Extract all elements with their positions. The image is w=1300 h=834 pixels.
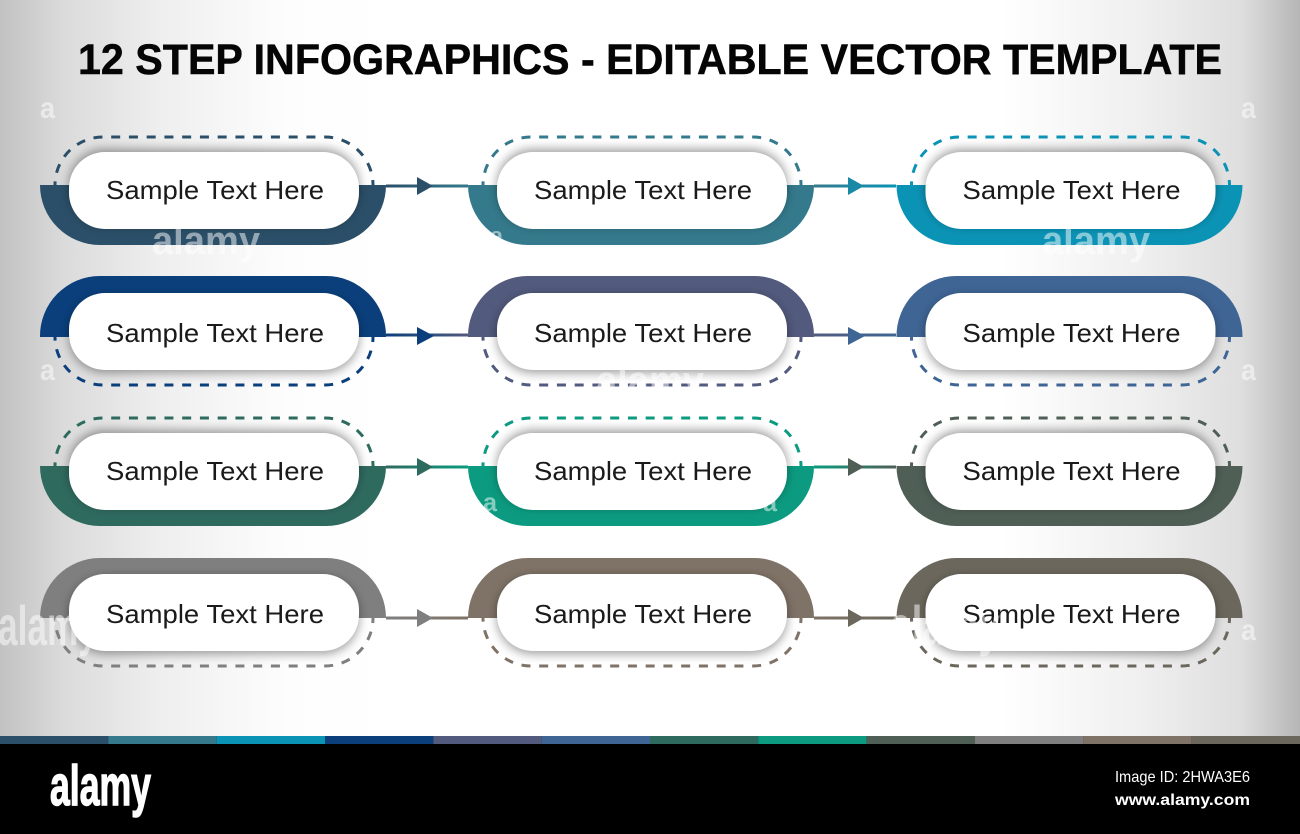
watermark fragments: a xyxy=(790,223,804,248)
watermark fragments: a xyxy=(490,223,504,248)
step 4 card: Sample Text Here xyxy=(106,318,324,348)
arrow: step 4 to 5 xyxy=(386,327,468,345)
watermark fragments: a xyxy=(1241,92,1256,125)
arrow: step 10 to 11 xyxy=(386,609,468,627)
arrow: step 11 to 12 xyxy=(814,609,896,627)
title: 12 STEP INFOGRAPHICS - EDITABLE VECTOR TEMPLATE xyxy=(78,36,1222,84)
step 7 card: Sample Text Here xyxy=(106,456,324,486)
watermark fragments xyxy=(0,92,1256,657)
watermark fragments: a xyxy=(763,487,778,517)
arrow: step 8 to 9 xyxy=(814,458,896,476)
footer logo: alamy xyxy=(50,754,151,818)
step 5 card xyxy=(468,276,814,385)
watermark fragments: alamy xyxy=(152,219,261,263)
step 6 card xyxy=(896,276,1243,385)
watermark fragments: a xyxy=(40,92,55,125)
step 9 card: Sample Text Here xyxy=(962,456,1180,486)
arrow: step 7 to 8 xyxy=(386,458,468,476)
image id: Image ID: 2HWA3E6 xyxy=(1115,769,1250,786)
step 3 card: Sample Text Here xyxy=(962,175,1180,205)
footer bar xyxy=(0,744,1300,834)
arrow: step 2 to 3 xyxy=(814,177,896,195)
step 1 card: Sample Text Here xyxy=(106,175,324,205)
step 10 card: Sample Text Here xyxy=(106,599,324,629)
watermark fragments: a xyxy=(1241,614,1256,647)
step 11 card: Sample Text Here xyxy=(534,599,752,629)
step 11 card xyxy=(468,558,814,666)
step 9 card xyxy=(896,418,1242,526)
step 2 card xyxy=(468,137,814,245)
watermark fragments: a xyxy=(40,354,55,387)
step 5 card: Sample Text Here xyxy=(534,318,752,348)
arrow: step 5 to 6 xyxy=(814,327,896,345)
watermark fragments: a xyxy=(1241,354,1256,387)
watermark fragments: alamy xyxy=(596,359,705,403)
step 12 card: Sample Text Here xyxy=(962,599,1180,629)
watermark fragments: a xyxy=(483,487,498,517)
step 4 card xyxy=(40,276,386,385)
step 2 card: Sample Text Here xyxy=(534,175,752,205)
arrow: step 1 to 2 xyxy=(386,177,468,195)
watermark fragments: alamy xyxy=(1042,219,1151,263)
step 8 card: Sample Text Here xyxy=(534,456,752,486)
step 12 card xyxy=(896,558,1242,666)
watermark fragments: alamy xyxy=(0,594,98,657)
colour strip xyxy=(0,736,1300,744)
watermark fragments: alamy xyxy=(890,594,1000,657)
website: www.alamy.com xyxy=(1114,792,1250,809)
step 7 card xyxy=(40,418,386,526)
step 10 card xyxy=(40,558,386,666)
step 8 card xyxy=(468,418,814,526)
step 6 card: Sample Text Here xyxy=(962,318,1180,348)
step 1 card xyxy=(40,137,386,245)
step 3 card xyxy=(896,137,1242,245)
